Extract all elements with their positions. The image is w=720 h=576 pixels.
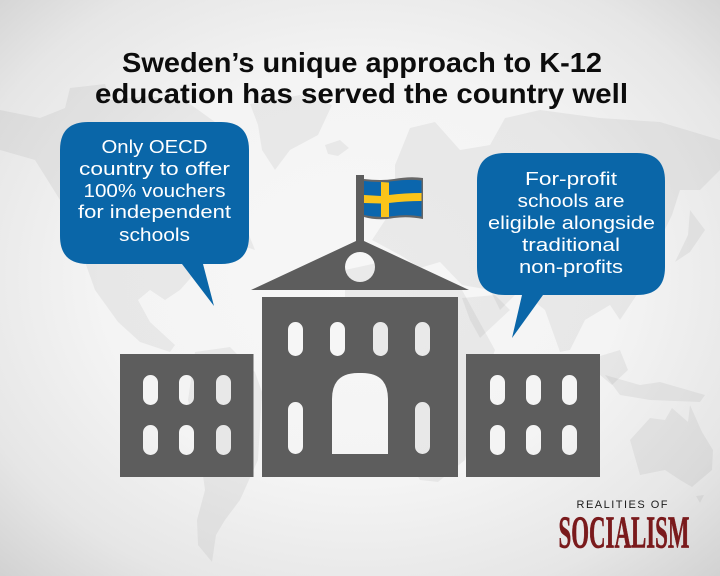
roof and pole: [251, 175, 469, 290]
callout: vouchers: 100% vouchers: [84, 180, 226, 201]
icon: Swedish flag: [364, 177, 423, 219]
callout: for-profit: [477, 153, 665, 338]
callout: vouchers: schools: [119, 224, 190, 245]
callout: for-profit: schools are: [518, 190, 624, 211]
logo: Realities of Socialism: REALITIES OF: [576, 499, 668, 511]
callout: for-profit: eligible alongside: [488, 212, 655, 233]
title: education has served the country well: [95, 78, 628, 109]
title: Sweden’s unique approach to K-12: [122, 47, 602, 78]
callout: for-profit: traditional: [522, 234, 620, 255]
callout: for-profit: non-profits: [519, 256, 623, 277]
central block: [262, 297, 458, 477]
school building: [120, 175, 600, 477]
right wing: [466, 354, 600, 477]
callout: vouchers: country to offer: [79, 158, 230, 179]
callout: vouchers: [60, 122, 249, 306]
callout: for-profit: For-profit: [525, 168, 617, 189]
title: [95, 47, 628, 109]
left wing: [120, 354, 254, 477]
callout: vouchers: Only OECD: [102, 136, 208, 157]
callout: vouchers: for independent: [78, 201, 231, 222]
